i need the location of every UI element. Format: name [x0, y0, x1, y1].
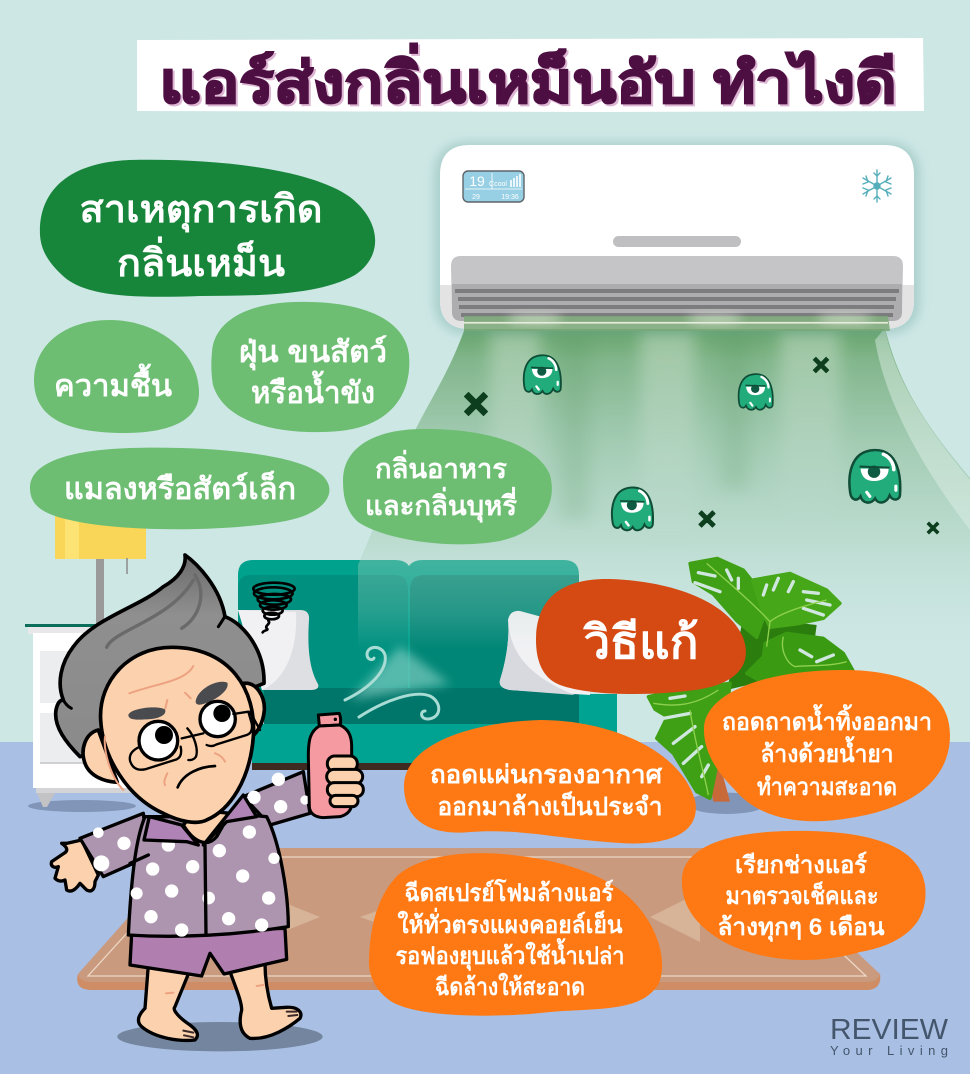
step: clean drain tray: ล้างด้วยน้ำยา [760, 735, 894, 768]
right arm [243, 772, 310, 825]
heading: causes of smell [40, 160, 375, 297]
leaf lower left [648, 683, 730, 798]
character: grumpy man with spray bottle [51, 555, 363, 1051]
eyebrows [128, 682, 228, 720]
title banner [137, 38, 924, 116]
heading: how to fix [536, 579, 746, 694]
air conditioner unit [434, 142, 920, 334]
indicator bar [613, 236, 741, 247]
step: clean filter: ถอดแผ่นกรองอากาศ [430, 761, 663, 789]
glasses and eyes [130, 701, 260, 770]
cause: food and cigarette smell [343, 429, 552, 544]
display panel [463, 171, 524, 202]
floor lamp [55, 515, 146, 628]
rug [77, 848, 880, 990]
face [101, 647, 254, 822]
display panel: Ccool [489, 181, 507, 188]
polka dots [93, 773, 310, 937]
mouth [178, 766, 215, 787]
display panel: 19:36 [501, 194, 519, 201]
dark inner foliage [727, 617, 817, 690]
air stream from unit [358, 328, 970, 650]
title banner: แอร์ส่งกลิ่นเหม็นอับ ทำไงดี [162, 45, 898, 116]
shorts [130, 928, 287, 976]
cause: food and cigarette smell: และกลิ่นบุหรี่ [365, 486, 517, 523]
spray bottle [308, 713, 352, 818]
shirt body [128, 813, 288, 936]
step: clean filter: ออกมาล้างเป็นประจำ [438, 791, 662, 821]
floor [0, 742, 970, 1074]
step: spray foam on coil: ให้ทั่วตรงแผงคอยล์เย็น [398, 907, 623, 939]
step: call technician: มาตรวจเช็คและ [726, 881, 878, 910]
ears [83, 683, 264, 782]
step: clean filter [404, 720, 696, 843]
shadow under feet [117, 1022, 323, 1051]
monstera plant [648, 558, 853, 814]
heading: how to fix: วิธีแก้ [582, 616, 698, 668]
leaf top right [753, 573, 840, 627]
step: spray foam on coil: รอฟองยุบแล้วใช้น้ำเปล่า [396, 937, 624, 972]
cause: dust and pet hair: ฝุ่น ขนสัตว์ [239, 335, 387, 371]
wall background [0, 0, 970, 742]
step: clean drain tray [704, 670, 950, 821]
step: spray foam on coil: ฉีดล้างให้สะอาด [435, 972, 585, 1001]
cause: dust and pet hair: หรือน้ำขัง [251, 370, 375, 410]
snowflake icon [863, 170, 891, 202]
side cabinet [25, 624, 136, 812]
step: clean drain tray: ทำความสะอาด [757, 774, 897, 801]
display panel: 19 [469, 173, 485, 189]
display panel: 29 [472, 194, 480, 201]
leaf top left [690, 558, 765, 637]
panel: solutions [369, 579, 950, 1016]
cause: insects: แมลงหรือสัตว์เล็ก [64, 470, 296, 506]
heading: causes of smell: สาเหตุการเกิด [80, 189, 322, 233]
collar [144, 795, 257, 845]
cause: food and cigarette smell: กลิ่นอาหาร [375, 449, 507, 484]
step: call technician [682, 831, 926, 960]
step: call technician: ล้างทุกๆ 6 เดือน [718, 914, 885, 943]
cause: dust and pet hair [211, 302, 409, 432]
cause: humidity [34, 320, 199, 433]
sofa [238, 560, 617, 770]
wrinkles and cheek lines [105, 666, 225, 790]
brand logo: Your Living [830, 1043, 948, 1058]
heading: causes of smell: กลิ่นเหม็น [117, 236, 285, 285]
brand logo: REVIEW [830, 1014, 949, 1046]
leaf mid right [747, 633, 853, 687]
ghost germs and x marks [465, 355, 939, 534]
legs and feet [138, 963, 301, 1040]
cause: humidity: ความชื้น [54, 363, 173, 403]
dark smell swirl icon [253, 583, 295, 632]
panel: causes [30, 160, 552, 544]
step: spray foam on coil [369, 853, 662, 1016]
step: clean drain tray: ถอดถาดน้ำทิ้งออกมา [722, 703, 932, 736]
left arm and hand [51, 813, 148, 891]
toe and leg marks [183, 1012, 297, 1037]
fist [327, 756, 363, 807]
step: spray foam on coil: ฉีดสเปรย์โฟมล้างแอร์ [404, 878, 614, 907]
title banner: แอร์ส่งกลิ่นเหม็นอับ ทำไงดี [160, 43, 896, 114]
step: call technician: เรียกช่างแอร์ [735, 851, 867, 879]
spray swirl [345, 646, 450, 719]
cause: insects [30, 448, 329, 529]
hair [56, 555, 264, 757]
